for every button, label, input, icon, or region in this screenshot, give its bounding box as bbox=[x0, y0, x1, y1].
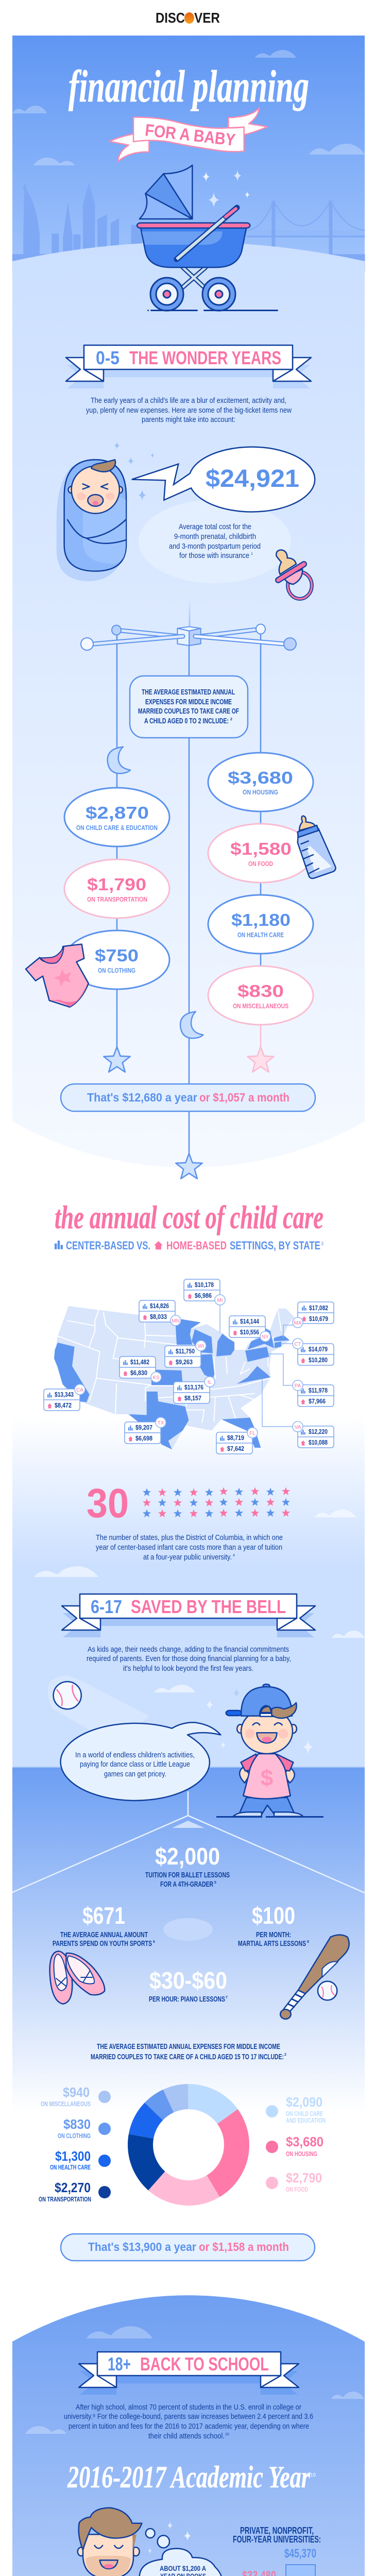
pill: $13,900 a year bbox=[61, 2234, 315, 2261]
callout: NY: NY bbox=[262, 1334, 269, 1340]
callout: CA bbox=[44, 1384, 85, 1411]
text: 30 states description: year of center-based infant care costs more than a year of tuition bbox=[96, 1544, 282, 1552]
callout: VA: $12,220 bbox=[309, 1428, 328, 1435]
stat: $30-$60 piano: 7 bbox=[226, 1996, 228, 1999]
callout: TX: TX bbox=[158, 1420, 164, 1426]
callout: NY: $10,556 bbox=[240, 1329, 259, 1336]
banner: 6-17 saved by the bell bbox=[62, 1594, 315, 1637]
mobile: arms and cube bbox=[81, 624, 296, 650]
pill: $13,900 a year: That's $13,900 a year bbox=[88, 2240, 196, 2253]
banner: 18+ back to school: 18+ bbox=[108, 2353, 131, 2375]
clouds: back to school bbox=[25, 2326, 364, 2434]
stat: $2,000 ballet: TUITION FOR BALLET LESSONS bbox=[145, 1871, 230, 1879]
hill: light blue panel bbox=[12, 242, 365, 1167]
box: average estimated annual expenses: MARRIED COUPLES TO TAKE CARE OF bbox=[138, 707, 239, 716]
caption blob: average total cost: 9-month prenatal, childbirth bbox=[174, 533, 256, 541]
text: 30 states description: 4 bbox=[233, 1554, 235, 1557]
text: after high school bbox=[64, 2403, 313, 2441]
speech bubble: $24,921 bbox=[132, 447, 315, 512]
callout: WI: $9,263 bbox=[176, 1359, 193, 1366]
text: 30 states description bbox=[96, 1534, 283, 1562]
speech bubble: children's activities: paying for dance class or Little League bbox=[80, 1760, 190, 1769]
banner: 6-17 saved by the bell: SAVED BY THE BELL bbox=[131, 1596, 286, 1617]
callout: TX bbox=[125, 1417, 166, 1444]
oval: $1,580 food bbox=[208, 824, 313, 883]
pill: $12,680 a year: That's $12,680 a year bbox=[87, 1091, 197, 1104]
stat: $100 martial arts bbox=[238, 1902, 309, 1948]
callout: WI: $11,750 bbox=[176, 1348, 195, 1355]
callout: KS: $11,482 bbox=[130, 1359, 149, 1366]
stat: $671 youth sports: THE AVERAGE ANNUAL AMOUNT bbox=[60, 1930, 148, 1939]
oval: $750 clothing: ON CLOTHING bbox=[98, 967, 135, 974]
icon: star center bbox=[176, 1154, 202, 1179]
callout: IL bbox=[174, 1377, 215, 1403]
callout: MI: $10,178 bbox=[195, 1281, 214, 1289]
stat: $671 youth sports: PARENTS SPEND ON YOUTH SPORTS bbox=[53, 1939, 152, 1948]
legend: health care: $1,300 bbox=[55, 2148, 91, 2164]
callout: PA bbox=[293, 1380, 334, 1406]
icon: moon center bbox=[180, 1012, 203, 1038]
callout: MN: MN bbox=[172, 1318, 180, 1324]
oval: $1,790 transportation bbox=[64, 859, 169, 918]
banner: 0-5 the wonder years: 0-5 bbox=[96, 347, 120, 368]
icon: star pink bbox=[247, 1047, 274, 1072]
callout: FL: $8,719 bbox=[227, 1434, 244, 1442]
subheading: center vs home based bbox=[55, 1239, 323, 1252]
callout: KS: $6,830 bbox=[130, 1369, 147, 1377]
legend: clothing: ON CLOTHING bbox=[58, 2132, 91, 2140]
text: intro early years bbox=[86, 397, 292, 424]
oval: $1,180 health care bbox=[208, 895, 313, 954]
subheading: center vs home based: 3 bbox=[321, 1241, 323, 1246]
text: after high school: After high school, almost 70 percent of students in the U.S. enroll in college or bbox=[76, 2403, 301, 2412]
stat: $2,000 ballet: 5 bbox=[214, 1881, 216, 1885]
legend: clothing bbox=[58, 2116, 111, 2140]
callout: IL: $8,157 bbox=[184, 1395, 201, 1402]
legend: child care: AND EDUCATION bbox=[286, 2116, 326, 2124]
subheading: center vs home based: HOME-BASED bbox=[166, 1239, 227, 1252]
text: 30 states description: at a four-year public university. bbox=[143, 1553, 232, 1562]
sparkles: boy bbox=[206, 1688, 313, 1754]
ribbon: for a baby bbox=[109, 108, 267, 161]
oval: $1,790 transportation: ON TRANSPORTATION bbox=[87, 895, 147, 903]
map: united states bbox=[54, 1306, 295, 1449]
callout: KS: KS bbox=[152, 1375, 160, 1381]
pill: $12,680 a year: or $1,057 a month bbox=[199, 1091, 289, 1104]
text: expenses ages 15 to 17: MARRIED COUPLES TO TAKE CARE OF A CHILD AGED 15 TO 17 INCLUDE: bbox=[91, 2053, 284, 2061]
heading: private universities: PRIVATE, NONPROFIT, bbox=[240, 2526, 314, 2536]
donut chart bbox=[140, 2097, 237, 2193]
legend: clothing: $830 bbox=[63, 2116, 91, 2132]
callout: PA: PA bbox=[295, 1383, 301, 1389]
legend: miscellaneous: $940 bbox=[63, 2084, 90, 2100]
legend: housing: ON HOUSING bbox=[286, 2150, 317, 2158]
sparkles: baby bbox=[114, 442, 155, 501]
callout: MI: $6,986 bbox=[195, 1292, 212, 1299]
text: as kids age: required of parents. Even for those doing financial planning for a baby, bbox=[87, 1655, 291, 1663]
callout: MN: $14,826 bbox=[150, 1302, 169, 1310]
icon: swaddled baby bbox=[57, 460, 126, 581]
caption blob: average total cost: Average total cost for the bbox=[179, 523, 251, 531]
clouds: middle bbox=[34, 1510, 365, 1692]
callout: TX: $6,698 bbox=[135, 1435, 152, 1442]
box: average estimated annual expenses: THE AVERAGE ESTIMATED ANNUAL bbox=[142, 688, 235, 697]
oval: $1,580 food: $1,580 bbox=[230, 839, 292, 858]
subheading: center vs home based: SETTINGS, BY STATE bbox=[230, 1239, 320, 1252]
icon: onesie bbox=[26, 944, 89, 1007]
callout: VA bbox=[293, 1421, 334, 1448]
caption blob: average total cost: 1 bbox=[251, 552, 253, 556]
legend: health care bbox=[50, 2148, 111, 2171]
text: as kids age: it's helpful to look beyond the first few years. bbox=[123, 1665, 253, 1673]
icon: pacifier bbox=[276, 550, 312, 599]
callout: PA: $7,966 bbox=[309, 1398, 326, 1405]
legend: transportation: ON TRANSPORTATION bbox=[39, 2195, 91, 2203]
icon: stroller bbox=[137, 165, 278, 311]
text: intro early years: parents might take into account: bbox=[142, 416, 235, 424]
sparkles: hero bbox=[202, 170, 250, 208]
icon: star left bbox=[104, 1047, 130, 1072]
pill: $12,680 a year bbox=[61, 1084, 315, 1111]
callout: NY: $14,144 bbox=[240, 1318, 259, 1325]
oval: $1,180 health care: $1,180 bbox=[231, 910, 291, 929]
legend: transportation bbox=[39, 2180, 111, 2203]
oval: $3,680 housing: $3,680 bbox=[228, 768, 293, 787]
stat: $30-$60 piano: $30-$60 bbox=[149, 1967, 227, 1994]
oval: $3,680 housing bbox=[208, 753, 313, 811]
text: expenses ages 15 to 17: 2 bbox=[284, 2053, 286, 2057]
text: after high school: their child attends school. bbox=[148, 2432, 225, 2441]
text: as kids age bbox=[87, 1646, 291, 1673]
text: after high school: 10 bbox=[225, 2433, 229, 2436]
oval: $1,580 food: ON FOOD bbox=[248, 860, 273, 868]
legend: health care: ON HEALTH CARE bbox=[50, 2163, 91, 2171]
legend: child care: ON CHILD CARE bbox=[286, 2110, 323, 2117]
banner: 6-17 saved by the bell: 6-17 bbox=[91, 1596, 122, 1617]
stat: $100 martial arts: $100 bbox=[252, 1902, 295, 1929]
legend: miscellaneous bbox=[41, 2084, 111, 2108]
text: expenses ages 15 to 17 bbox=[91, 2042, 286, 2061]
stat: $671 youth sports bbox=[53, 1902, 155, 1948]
icon: man with laptop bbox=[58, 2508, 173, 2576]
callout: IL: IL bbox=[208, 1380, 212, 1385]
subheading: center vs home based: CENTER-BASED VS. bbox=[66, 1239, 150, 1252]
callout: CA: $13,343 bbox=[55, 1391, 74, 1398]
legend: transportation: $2,270 bbox=[55, 2180, 91, 2195]
stat: $2,000 ballet: FOR A 4TH-GRADER bbox=[160, 1880, 213, 1889]
speech bubble: children's activities bbox=[61, 1722, 220, 1801]
stat: $2,000 ballet: $2,000 bbox=[155, 1843, 220, 1870]
text: intro early years: The early years of a child's life are a blur of excitement, activity and, bbox=[91, 397, 286, 405]
speech bubble: $24,921: $24,921 bbox=[206, 465, 299, 493]
callout: MA: $10,679 bbox=[309, 1315, 328, 1323]
banner: 0-5 the wonder years bbox=[66, 345, 311, 388]
caption blob: average total cost: and 3-month postpartum period bbox=[169, 543, 261, 551]
box: average estimated annual expenses: 2 bbox=[230, 718, 232, 721]
oval: $2,870 child care: $2,870 bbox=[86, 803, 149, 822]
stat: $30-$60 piano: PER HOUR: PIANO LESSONS bbox=[149, 1995, 225, 2004]
callout: MI bbox=[184, 1279, 225, 1305]
speech bubble: children's activities: In a world of endless children's activities, bbox=[75, 1751, 195, 1759]
icon: baseball bat and ball bbox=[280, 1935, 349, 2019]
callout: CA: $8,472 bbox=[55, 1402, 72, 1409]
clouds: hero bbox=[12, 50, 365, 165]
callout: CT: $10,280 bbox=[309, 1357, 328, 1364]
stat: $100 martial arts: MARTIAL ARTS LESSONS bbox=[238, 1939, 306, 1948]
legend: child care bbox=[266, 2094, 326, 2124]
callout: TX: $9,207 bbox=[135, 1424, 152, 1431]
oval: $3,680 housing: ON HOUSING bbox=[243, 788, 278, 796]
callout: VA: $10,088 bbox=[309, 1439, 328, 1446]
pill: $13,900 a year: or $1,158 a month bbox=[199, 2240, 289, 2253]
icon: boy with cap: $ bbox=[261, 1766, 273, 1791]
bar chart: private universities: $45,370 bbox=[284, 2547, 316, 2561]
thought cloud: books and supplies: ABOUT $1,200 A bbox=[160, 2564, 206, 2572]
callout: CT: $14,079 bbox=[309, 1346, 328, 1353]
callout: MN bbox=[139, 1300, 181, 1326]
callout: MA: $17,082 bbox=[309, 1304, 328, 1312]
callout: MI: MI bbox=[217, 1298, 223, 1303]
bar chart: private universities bbox=[54, 2547, 325, 2576]
callout: PA: $11,978 bbox=[309, 1387, 328, 1394]
logo: Discover top bbox=[156, 10, 220, 26]
banner: 0-5 the wonder years: THE WONDER YEARS bbox=[129, 347, 281, 368]
thought bubbles bbox=[146, 2529, 169, 2548]
stat: $2,000 ballet bbox=[145, 1843, 230, 1889]
icon: boy with cap bbox=[216, 1684, 323, 1818]
caption blob: average total cost bbox=[139, 500, 291, 583]
legend: child care: $2,090 bbox=[286, 2094, 322, 2110]
box: average estimated annual expenses: A CHILD AGED 0 TO 2 INCLUDE: bbox=[144, 717, 229, 725]
callout: CA: CA bbox=[76, 1387, 83, 1393]
oval: $1,790 transportation: $1,790 bbox=[87, 875, 146, 894]
stat: $100 martial arts: 8 bbox=[307, 1940, 309, 1944]
callout: WI: WI bbox=[198, 1344, 204, 1349]
oval: $750 clothing bbox=[64, 930, 169, 989]
heading: private universities bbox=[233, 2526, 321, 2545]
callout: KS bbox=[120, 1357, 161, 1382]
callout: FL: FL bbox=[249, 1431, 255, 1436]
stat: $671 youth sports: 6 bbox=[153, 1940, 155, 1944]
legend: housing: $3,680 bbox=[286, 2134, 323, 2149]
logo: Discover top: DISC bbox=[156, 10, 185, 26]
icon: ballet shoes bbox=[50, 1951, 105, 2004]
callout: CT bbox=[293, 1338, 334, 1365]
stat: $100 martial arts: PER MONTH: bbox=[256, 1930, 291, 1939]
skyline: bridge right bbox=[246, 201, 365, 261]
oval: $830 miscellaneous bbox=[208, 966, 313, 1025]
banner: 18+ back to school bbox=[79, 2352, 299, 2395]
stars grid: 30 states bbox=[143, 1487, 290, 1517]
icon: baseball flying bbox=[48, 1675, 149, 1730]
text: intro early years: yup, plenty of new expenses. Here are some of the big-ticket items new bbox=[86, 406, 292, 415]
legend: food: ON FOOD bbox=[286, 2185, 308, 2193]
sparkles: man bbox=[148, 2521, 191, 2576]
caption blob: average total cost: for those with insurance bbox=[179, 552, 249, 560]
callout: FL bbox=[216, 1428, 258, 1454]
callout: WI bbox=[165, 1341, 206, 1367]
callout: FL: $7,642 bbox=[227, 1445, 244, 1452]
oval: $830 miscellaneous: $830 bbox=[237, 981, 284, 1001]
callout: MN: $8,033 bbox=[150, 1313, 167, 1320]
oval: $830 miscellaneous: ON MISCELLANEOUS bbox=[233, 1002, 288, 1010]
oval: $1,180 health care: ON HEALTH CARE bbox=[237, 931, 284, 939]
box: average estimated annual expenses: EXPENSES FOR MIDDLE INCOME bbox=[145, 698, 232, 706]
banner: 18+ back to school: BACK TO SCHOOL bbox=[140, 2353, 269, 2375]
legend: housing bbox=[266, 2134, 323, 2158]
callout: MA: MA bbox=[294, 1320, 302, 1326]
legend: food: $2,790 bbox=[286, 2170, 322, 2185]
icon: baby bottle bbox=[298, 816, 336, 878]
legend: miscellaneous: ON MISCELLANEOUS bbox=[41, 2100, 91, 2108]
callout: CT: CT bbox=[294, 1342, 301, 1347]
oval: $750 clothing: $750 bbox=[95, 946, 139, 965]
text: after high school: university.⁹ For the college-bound, parents saw increases between 2.4 percent and 3.6 bbox=[64, 2413, 313, 2421]
text: as kids age: As kids age, their needs change, adding to the financial commitments bbox=[88, 1646, 289, 1654]
icon: moon left bbox=[108, 747, 130, 773]
map connectors bbox=[220, 1300, 294, 1427]
heading: private universities: FOUR-YEAR UNIVERSITIES: bbox=[233, 2534, 321, 2545]
speech bubble: children's activities: games can get pricey. bbox=[104, 1770, 166, 1778]
mobile: hanging strings bbox=[117, 599, 261, 1155]
stat: $671 youth sports: $671 bbox=[82, 1902, 125, 1929]
stat: $30-$60 piano bbox=[149, 1967, 228, 2004]
text: after high school: percent in tuition and fees for the 2016 to 2017 academic year, depending on where bbox=[69, 2422, 309, 2431]
field: home plate lines bbox=[12, 1791, 365, 1941]
callout: VA: VA bbox=[295, 1425, 301, 1430]
oval: $2,870 child care: ON CHILD CARE & EDUCATION bbox=[76, 824, 158, 832]
oval: $2,870 child care bbox=[64, 788, 169, 846]
skyline: city left bbox=[12, 182, 365, 272]
box: average estimated annual expenses bbox=[130, 676, 248, 738]
stat: 30: 30 bbox=[87, 1480, 129, 1526]
callout: MA bbox=[293, 1302, 334, 1328]
logo: Discover top: VER bbox=[194, 10, 220, 26]
legend: food bbox=[266, 2170, 322, 2193]
heading: 2016-2017 academic year: 10 bbox=[310, 2472, 316, 2478]
text: expenses ages 15 to 17: THE AVERAGE ESTIMATED ANNUAL EXPENSES FOR MIDDLE INCOME bbox=[97, 2042, 280, 2051]
callout: IL: $13,176 bbox=[184, 1384, 203, 1391]
thought cloud: books and supplies bbox=[140, 2549, 223, 2576]
ribbon: for a baby: FOR A BABY bbox=[144, 120, 236, 149]
callout: NY bbox=[229, 1316, 270, 1342]
text: 30 states description: The number of states, plus the District of Columbia, in which one bbox=[96, 1534, 283, 1542]
